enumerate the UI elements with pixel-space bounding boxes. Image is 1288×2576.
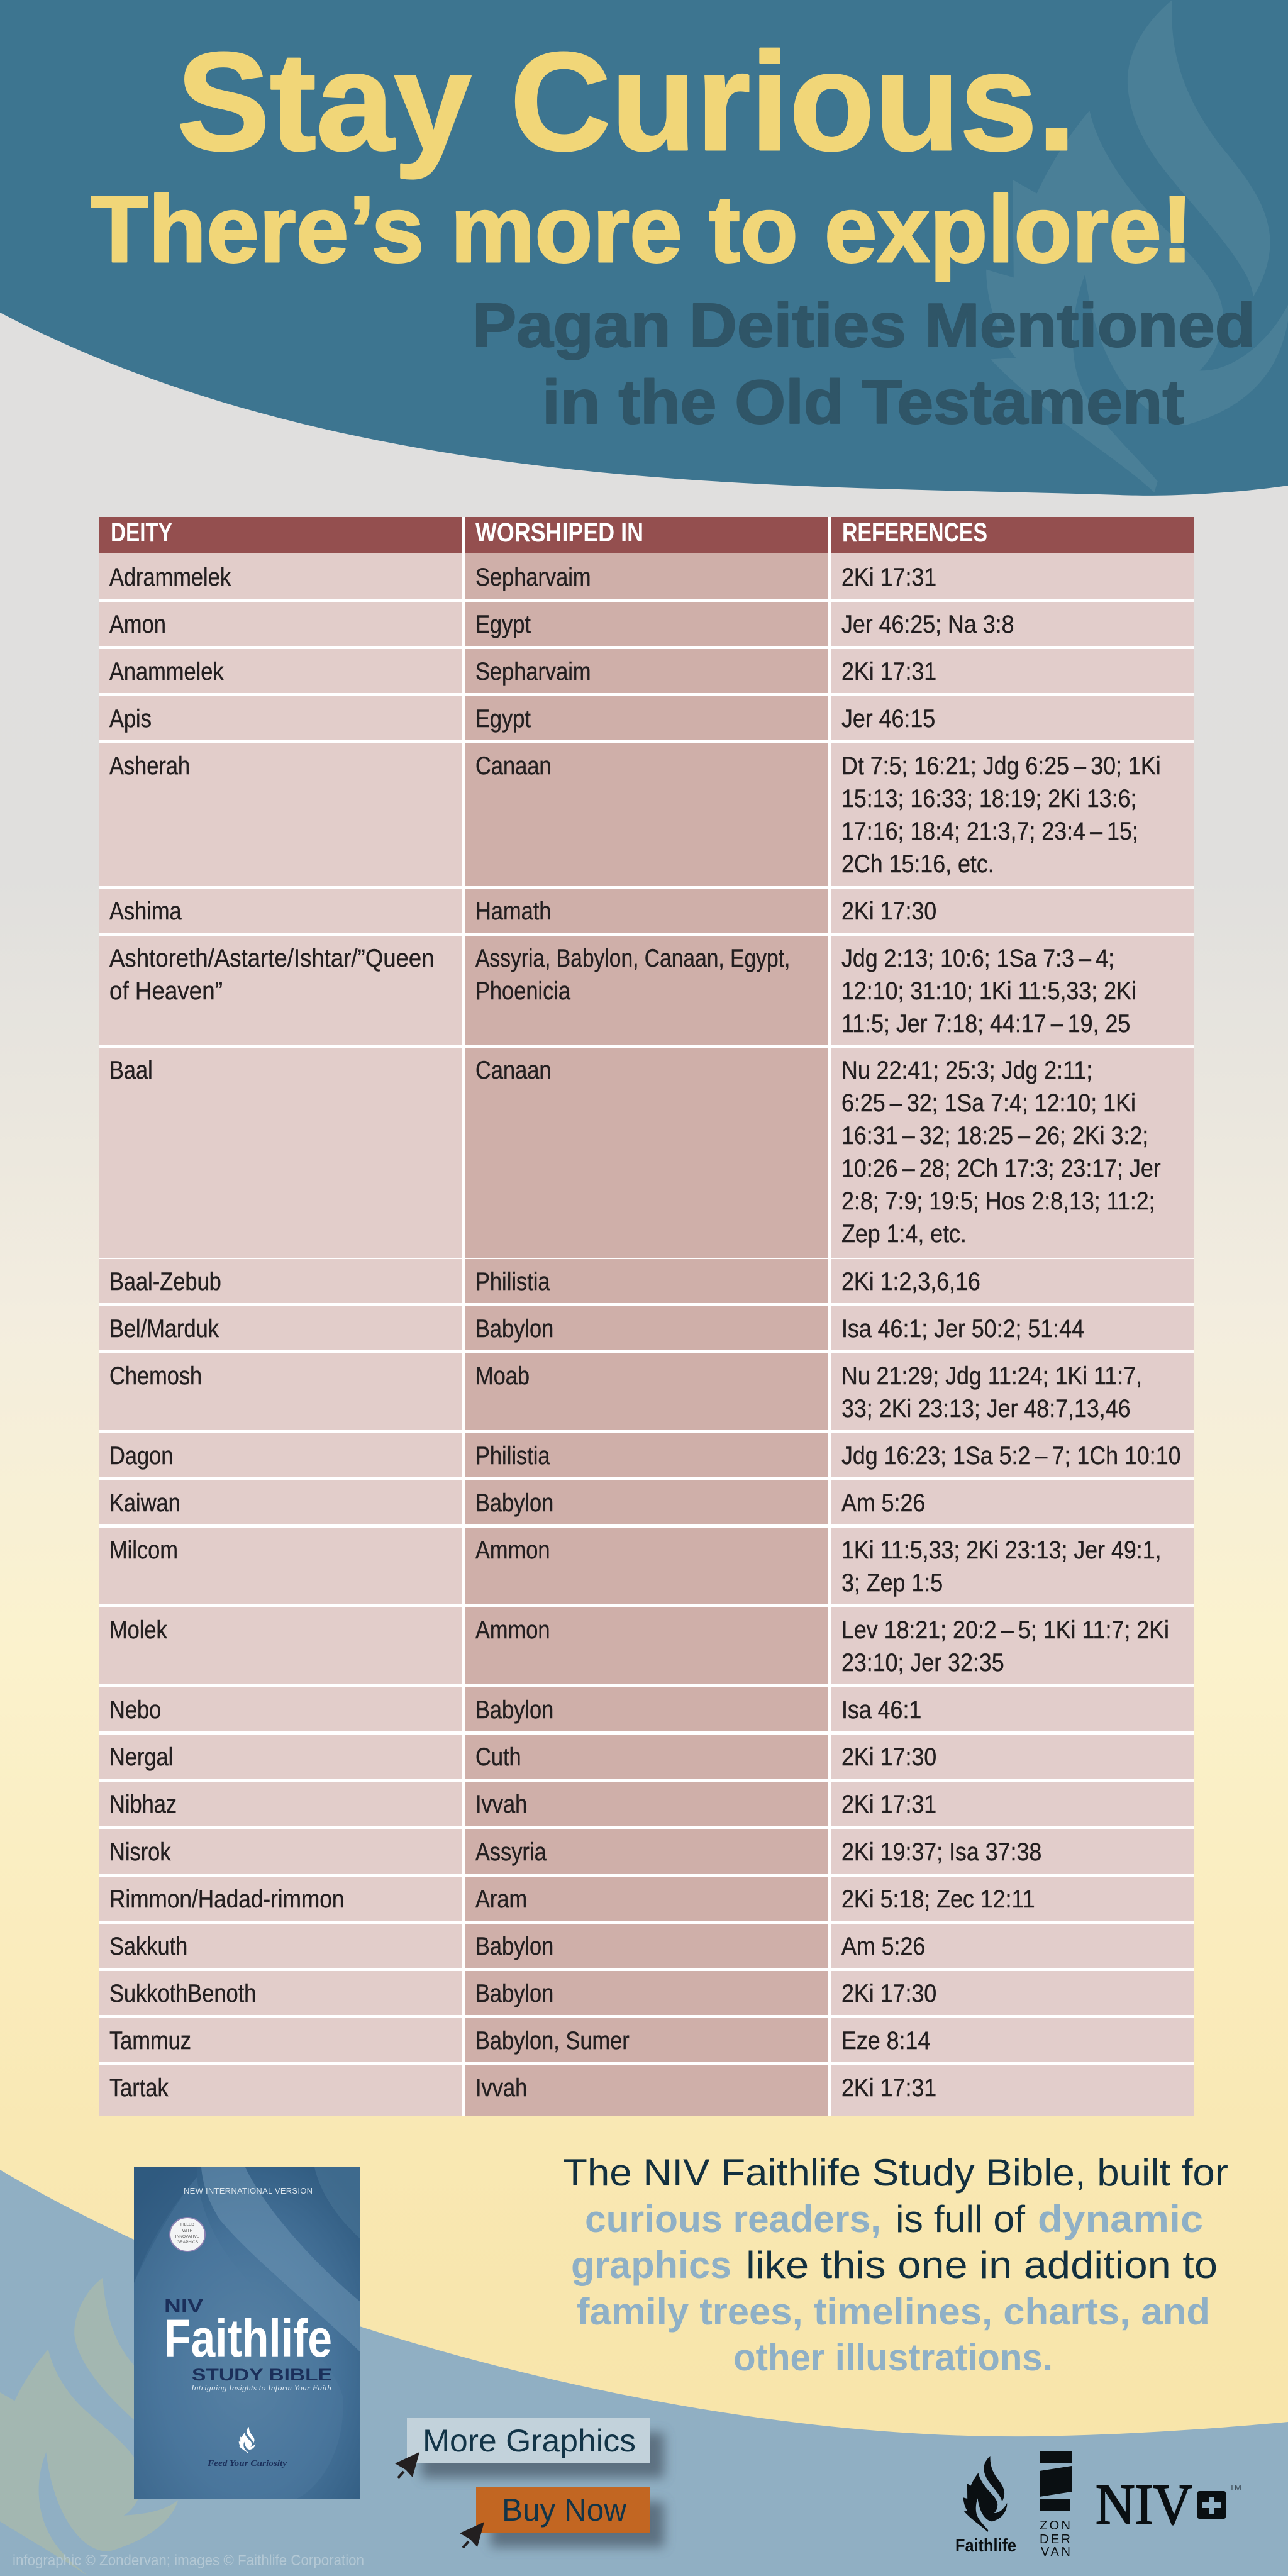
row: Nergal: Cuth: [475, 1743, 521, 1771]
promo paragraph: is full of: [896, 2198, 1025, 2240]
row: SukkothBenoth: Babylon: [475, 1979, 553, 2007]
row: Kaiwan: Kaiwan: [109, 1489, 180, 1517]
title: Stay Curious.: Stay Curious.: [177, 24, 1076, 180]
button: More Graphics: [407, 2418, 664, 2478]
subtitle: in the Old Testament: [542, 367, 1184, 436]
row: Baal-Zebub: [99, 1259, 1194, 1303]
row: Asherah: Asherah: [109, 752, 190, 780]
row: Baal: [99, 1048, 1194, 1258]
bottom-left pale flame watermark: [0, 2278, 178, 2576]
row: Rimmon/Hadad-rimmon: [99, 1877, 1194, 1921]
row: Nergal: Nergal: [109, 1743, 173, 1771]
row: Ashima: Hamath: [475, 897, 551, 925]
row: Adrammelek: 2Ki 17:31: [841, 564, 936, 591]
NIV logo: NIV: [1096, 2472, 1192, 2536]
row: Molek: Ammon: [475, 1616, 550, 1644]
book badge: FILLED: [180, 2223, 194, 2227]
row: Chemosh: Chemosh: [109, 1362, 202, 1390]
row: Molek: [99, 1607, 1194, 1684]
row: Rimmon/Hadad-rimmon: Rimmon/Hadad-rimmon: [109, 1885, 344, 1913]
promo paragraph: like this one in addition to: [746, 2244, 1218, 2286]
row: Milcom: 1Ki 11:5,33; 2Ki 23:13; Jer 49:1,: [841, 1536, 1162, 1564]
row: Apis: [99, 696, 1194, 740]
row: Amon: Amon: [109, 610, 166, 638]
row: Milcom: Ammon: [475, 1536, 550, 1564]
row: Ashtoreth: Assyria, Babylon, Canaan, Egypt,: [475, 944, 790, 972]
row: Dagon: Dagon: [109, 1441, 173, 1470]
row: Ashtoreth: of Heaven”: [109, 977, 223, 1005]
arrow cursor: Buy Now: [460, 2522, 484, 2548]
row: Baal-Zebub: Baal-Zebub: [109, 1267, 221, 1296]
book tagline: Intriguing Insights to Inform Your Faith: [191, 2383, 331, 2392]
row: Ashtoreth: [99, 936, 1194, 1045]
row: SukkothBenoth: 2Ki 17:30: [841, 1980, 936, 2007]
row: Tammuz: Tammuz: [109, 2026, 191, 2055]
row: Ashima: [99, 889, 1194, 933]
row: Nisrok: 2Ki 19:37; Isa 37:38: [841, 1838, 1041, 1866]
row: Nisrok: Nisrok: [109, 1838, 171, 1866]
row: Ashima: 2Ki 17:30: [841, 897, 936, 925]
row: Chemosh: Nu 21:29; Jdg 11:24; 1Ki 11:7,: [841, 1362, 1142, 1390]
row: Kaiwan: [99, 1480, 1194, 1524]
book flame icon: [239, 2427, 255, 2453]
book slogan: Feed Your Curiosity: [207, 2459, 287, 2468]
book Faithlife: Faithlife: [164, 2309, 332, 2368]
button: Buy Now: Buy Now: [502, 2492, 627, 2528]
row: Asherah: [99, 743, 1194, 886]
row: Ashtoreth: Phoenicia: [475, 977, 570, 1005]
row: Tartak: [99, 2065, 1194, 2116]
row: Asherah: Dt 7:5; 16:21; Jdg 6:25 – 30; 1Ki: [841, 752, 1161, 780]
row: Nisrok: Assyria: [475, 1838, 547, 1866]
row: Bel/Marduk: Isa 46:1; Jer 50:2; 51:44: [841, 1315, 1084, 1343]
row: Milcom: [99, 1528, 1194, 1604]
row: Baal: Canaan: [475, 1056, 551, 1084]
row: Nebo: Isa 46:1: [841, 1696, 921, 1724]
row: Baal-Zebub: Philistia: [475, 1267, 550, 1296]
Zondervan logo: DER: [1040, 2533, 1070, 2546]
row: Baal: 6:25 – 32; 1Sa 7:4; 12:10; 1Ki: [841, 1089, 1136, 1117]
image credit: infographic © Zondervan; images © Faithlife Corporation: [13, 2552, 364, 2569]
row: Adrammelek: [99, 553, 1194, 599]
row: Baal: Baal: [109, 1056, 153, 1084]
row: Nergal: 2Ki 17:30: [841, 1743, 936, 1771]
row: Rimmon/Hadad-rimmon: 2Ki 5:18; Zec 12:11: [841, 1885, 1035, 1913]
row: SukkothBenoth: SukkothBenoth: [109, 1979, 256, 2007]
row: Dagon: Philistia: [475, 1441, 550, 1470]
arrow cursor: More Graphics: [395, 2452, 419, 2478]
Faithlife logo: Faithlife: [955, 2536, 1016, 2556]
row: Ashtoreth: 12:10; 31:10; 1Ki 11:5,33; 2Ki: [841, 977, 1136, 1005]
button: More Graphics: More Graphics: [423, 2423, 636, 2458]
row: Bel/Marduk: Bel/Marduk: [109, 1314, 219, 1343]
row: Sakkuth: Babylon: [475, 1932, 553, 1960]
table header: REFERENCES: [842, 518, 987, 548]
table header: [99, 517, 1194, 553]
button: Buy Now: [476, 2487, 664, 2547]
promo paragraph: graphics: [571, 2244, 731, 2286]
promo paragraph: The NIV Faithlife Study Bible, built for: [563, 2151, 1228, 2194]
row: Nibhaz: Nibhaz: [109, 1790, 177, 1818]
row: Kaiwan: Am 5:26: [841, 1489, 925, 1517]
book badge: GRAPHICS: [177, 2240, 199, 2245]
row: Baal: 2:8; 7:9; 19:5; Hos 2:8,13; 11:2;: [841, 1187, 1155, 1215]
row: Chemosh: [99, 1353, 1194, 1430]
row: Dagon: [99, 1433, 1194, 1477]
row: Ashtoreth: 11:5; Jer 7:18; 44:17 – 19, 25: [841, 1010, 1130, 1038]
top teal wave: [0, 0, 1288, 496]
book edition line: NEW INTERNATIONAL VERSION: [184, 2186, 313, 2196]
row: Asherah: 2Ch 15:16, etc.: [841, 850, 994, 878]
Zondervan logo: ZON: [1040, 2519, 1070, 2533]
row: Apis: Egypt: [475, 704, 531, 733]
table header: WORSHIPED IN: [475, 518, 643, 548]
row: Milcom: Milcom: [109, 1536, 178, 1564]
row: Tartak: 2Ki 17:31: [841, 2074, 936, 2102]
row: SukkothBenoth: [99, 1971, 1194, 2015]
row: Dagon: Jdg 16:23; 1Sa 5:2 – 7; 1Ch 10:10: [841, 1442, 1181, 1470]
row: Ashtoreth: Jdg 2:13; 10:6; 1Sa 7:3 – 4;: [841, 945, 1114, 972]
promo paragraph: [563, 2151, 1228, 2379]
top-right flame watermark: [986, 0, 1288, 492]
row: Nibhaz: 2Ki 17:31: [841, 1790, 936, 1818]
row: Nergal: [99, 1735, 1194, 1779]
Zondervan logo: [1040, 2451, 1072, 2559]
row: Molek: 23:10; Jer 32:35: [841, 1649, 1004, 1677]
table of deities: [99, 517, 1194, 2116]
row: Amon: Egypt: [475, 610, 531, 638]
row: Anammelek: Sepharvaim: [475, 657, 591, 686]
row: Sakkuth: Am 5:26: [841, 1933, 925, 1960]
row: Tartak: Ivvah: [475, 2074, 527, 2102]
row: Baal: Nu 22:41; 25:3; Jdg 2:11;: [841, 1057, 1092, 1084]
book badge: [170, 2218, 205, 2251]
row: Nebo: [99, 1687, 1194, 1731]
row: Adrammelek: Adrammelek: [109, 563, 231, 591]
row: Tartak: Tartak: [109, 2074, 169, 2102]
row: Baal: 10:26 – 28; 2Ch 17:3; 23:17; Jer: [841, 1155, 1161, 1182]
row: Apis: Jer 46:15: [841, 705, 935, 733]
row: Nibhaz: [99, 1782, 1194, 1826]
row: Amon: Jer 46:25; Na 3:8: [841, 611, 1014, 638]
row: Asherah: 17:16; 18:4; 21:3,7; 23:4 – 15;: [841, 818, 1138, 845]
Faithlife logo: [955, 2456, 1016, 2556]
row: Ashima: Ashima: [109, 897, 182, 925]
title line 2: There’s more to explore!: [91, 176, 1193, 282]
row: Bel/Marduk: Babylon: [475, 1314, 553, 1343]
book badge: WITH: [182, 2229, 193, 2233]
row: Baal-Zebub: 2Ki 1:2,3,6,16: [841, 1268, 980, 1296]
NIV logo: TM: [1230, 2483, 1241, 2492]
row: Asherah: Canaan: [475, 752, 551, 780]
row: Chemosh: 33; 2Ki 23:13; Jer 48:7,13,46: [841, 1395, 1131, 1423]
book NIV: NIV: [164, 2296, 204, 2316]
row: Rimmon/Hadad-rimmon: Aram: [475, 1885, 527, 1913]
promo paragraph: dynamic: [1038, 2198, 1203, 2240]
row: Milcom: 3; Zep 1:5: [841, 1569, 943, 1597]
row: Baal: 16:31 – 32; 18:25 – 26; 2Ki 3:2;: [841, 1122, 1148, 1150]
promo paragraph: family trees, timelines, charts, and: [577, 2290, 1210, 2333]
book cover: [134, 2167, 360, 2499]
row: Anammelek: 2Ki 17:31: [841, 658, 936, 686]
row: Chemosh: Moab: [475, 1362, 530, 1390]
row: Tammuz: Eze 8:14: [841, 2027, 930, 2055]
book badge: INNOVATIVE: [175, 2235, 200, 2239]
row: Asherah: 15:13; 16:33; 18:19; 2Ki 13:6;: [841, 785, 1137, 813]
row: Amon: [99, 602, 1194, 646]
row: Nisrok: [99, 1829, 1194, 1874]
row: Ashtoreth: Ashtoreth/Astarte/Ishtar/”Queen: [109, 945, 435, 972]
row: Nibhaz: Ivvah: [475, 1790, 527, 1818]
promo paragraph: curious readers,: [585, 2198, 881, 2240]
subtitle: Pagan Deities Mentioned: [472, 291, 1255, 360]
subtitle: [472, 291, 1255, 436]
book Study Bible: STUDY BIBLE: [192, 2365, 332, 2384]
row: Anammelek: Anammelek: [109, 657, 224, 686]
row: Bel/Marduk: [99, 1306, 1194, 1350]
row: Molek: Molek: [109, 1616, 167, 1644]
row: Tammuz: Babylon, Sumer: [475, 2026, 630, 2055]
bottom blue wave: [0, 2170, 1288, 2576]
row: Adrammelek: Sepharvaim: [475, 563, 591, 591]
promo paragraph: other illustrations.: [733, 2336, 1053, 2379]
row: Kaiwan: Babylon: [475, 1489, 553, 1517]
row: Tammuz: [99, 2018, 1194, 2062]
row: Sakkuth: [99, 1924, 1194, 1968]
row: Sakkuth: Sakkuth: [109, 1932, 187, 1960]
row: Baal: Zep 1:4, etc.: [841, 1220, 967, 1248]
row: Nebo: Babylon: [475, 1696, 553, 1724]
Zondervan logo: VAN: [1041, 2545, 1070, 2559]
row: Nebo: Nebo: [109, 1696, 161, 1724]
row: Anammelek: [99, 649, 1194, 693]
table header: DEITY: [111, 518, 172, 548]
row: Apis: Apis: [109, 704, 152, 733]
row: Molek: Lev 18:21; 20:2 – 5; 1Ki 11:7; 2Ki: [841, 1616, 1169, 1644]
